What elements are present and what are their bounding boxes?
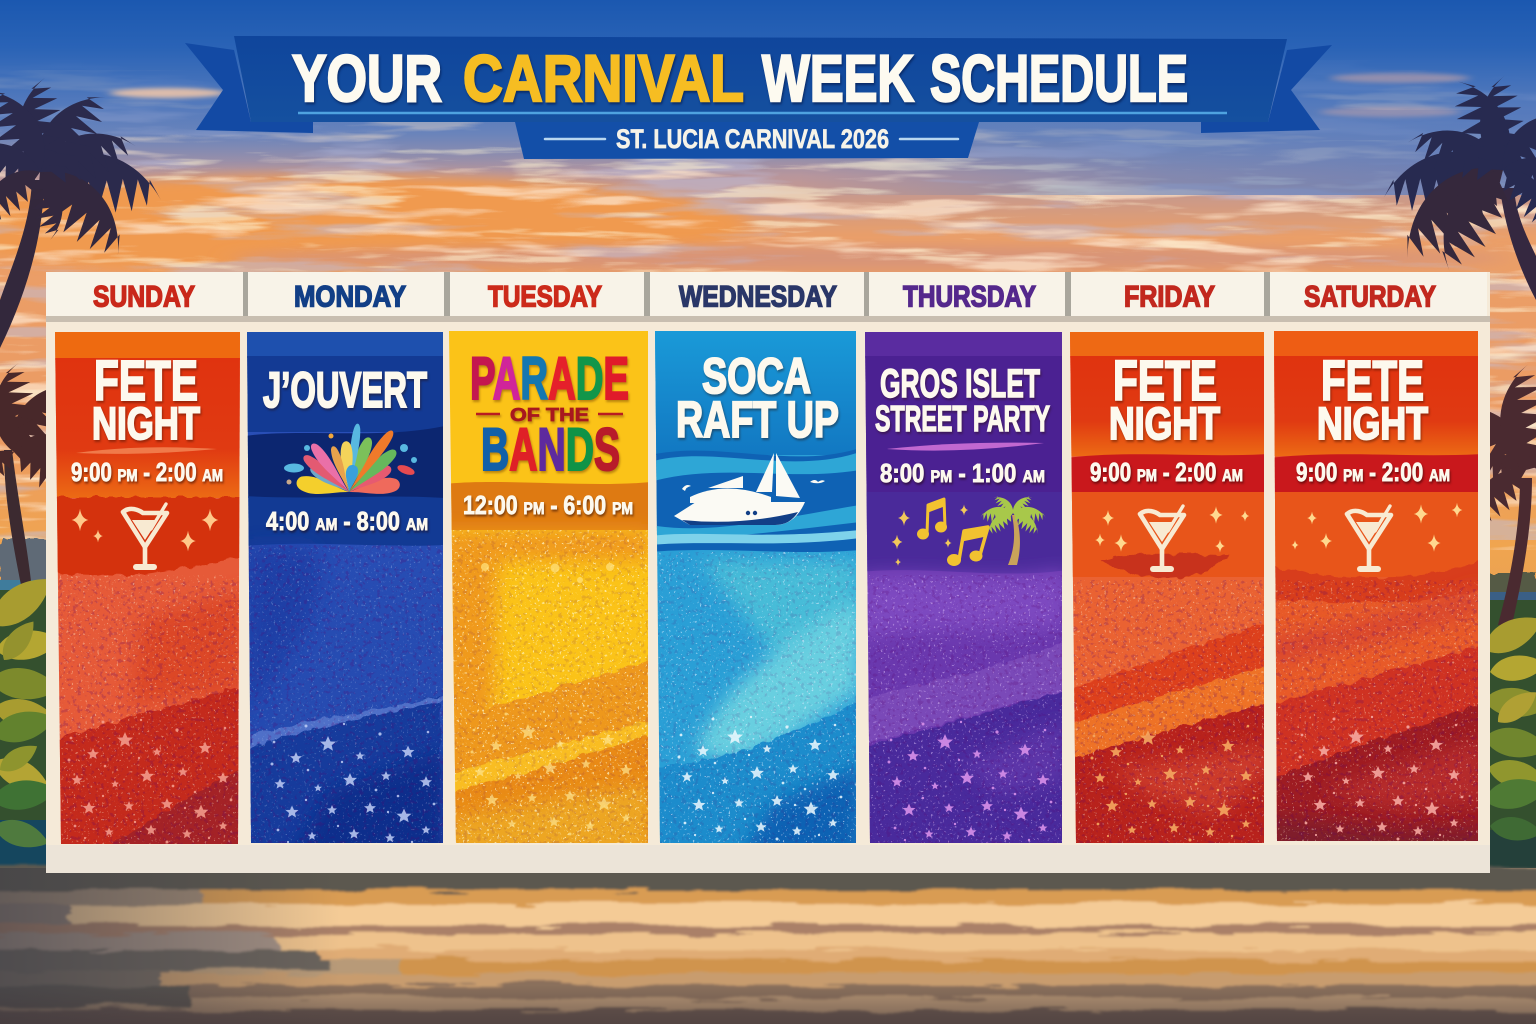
panel: Monday J'ouvert [245, 330, 445, 860]
beach [0, 866, 1536, 1024]
day header: Monday: MONDAY [294, 280, 406, 314]
title text [292, 41, 1188, 115]
day header: Friday [1071, 272, 1264, 316]
day header: Tuesday [450, 272, 644, 316]
day header: Saturday [1270, 272, 1487, 316]
shore and tree line behind the board, right [1486, 572, 1536, 875]
event title [1317, 349, 1428, 449]
event title: GROS ISLET [880, 362, 1040, 406]
event title: BANDS [481, 416, 620, 483]
panel: Thursday Gros Islet street party [860, 330, 1066, 860]
event title: OF THE [510, 405, 589, 425]
event title: PARADE [470, 345, 629, 412]
day header: Sunday: SUNDAY [93, 280, 195, 314]
icon: colour splash [284, 423, 417, 500]
day header: Wednesday [650, 272, 864, 316]
event title: FETE [1113, 349, 1217, 413]
title text: CARNIVAL [463, 41, 744, 115]
day header: Friday: FRIDAY [1124, 280, 1215, 314]
icon: cocktail with sparkles [72, 504, 218, 567]
subtitle ribbon [515, 122, 979, 159]
palm tree: upper left [0, 76, 163, 348]
event title: NIGHT [92, 398, 200, 449]
panel: Saturday fete night [1270, 329, 1482, 860]
day header: Thursday [869, 272, 1065, 316]
day header: Sunday [46, 272, 243, 316]
icon: cocktail with sparkles [1095, 506, 1249, 569]
event title: SOCA [702, 348, 811, 404]
event title [875, 362, 1050, 439]
subtitle text: ST. LUCIA CARNIVAL 2026 [616, 124, 889, 154]
event time: 8:00 PM - 1:00 AM [880, 458, 1045, 488]
event title: RAFT UP [676, 391, 839, 448]
schedule board [46, 272, 1490, 873]
day header: Monday [248, 272, 444, 316]
day header: Saturday: SATURDAY [1304, 280, 1436, 314]
panel: Tuesday parade of the bands [440, 330, 651, 860]
foliage: lower right [1477, 607, 1536, 845]
panel: Wednesday soca raft up [650, 330, 860, 860]
title text: WEEK [762, 41, 914, 115]
event time: 9:00 PM - 2:00 AM [71, 457, 223, 487]
event title: NIGHT [1109, 398, 1220, 449]
event time: 9:00 PM - 2:00 AM [1090, 457, 1243, 487]
icon: music notes and palm [892, 492, 1046, 566]
event title [470, 345, 629, 483]
palm tree: lower right [1440, 362, 1536, 625]
palm tree: upper right [1380, 72, 1536, 300]
icon: boat [674, 453, 825, 525]
event title: J’OUVERT [263, 362, 427, 418]
title text: SCHEDULE [930, 41, 1188, 115]
foliage: lower left [0, 567, 63, 856]
title text: YOUR [292, 41, 442, 115]
day header: Wednesday: WEDNESDAY [679, 280, 837, 314]
shore and tree line behind the board, left [0, 538, 50, 875]
event title: NIGHT [1317, 398, 1428, 449]
event title: FETE [94, 349, 198, 413]
event time: 4:00 AM - 8:00 AM [266, 506, 428, 536]
event time: 12:00 PM - 6:00 PM [463, 490, 633, 520]
day header: Thursday: THURSDAY [903, 280, 1036, 314]
ribbon tails [185, 43, 1332, 133]
palm tree: lower left [0, 361, 89, 590]
event title [1109, 349, 1220, 449]
event title: STREET PARTY [875, 398, 1050, 439]
event time: 9:00 PM - 2:00 AM [1296, 457, 1450, 487]
title ribbon banner [185, 36, 1332, 159]
event title [676, 348, 839, 448]
panel: Sunday fete night [50, 330, 245, 860]
event title [92, 349, 200, 449]
icon: cocktail with sparkles [1291, 503, 1462, 569]
event title: FETE [1321, 349, 1424, 413]
ribbon main band [234, 36, 1287, 122]
panel: Friday fete night [1066, 330, 1268, 860]
day header: Tuesday: TUESDAY [488, 280, 602, 314]
